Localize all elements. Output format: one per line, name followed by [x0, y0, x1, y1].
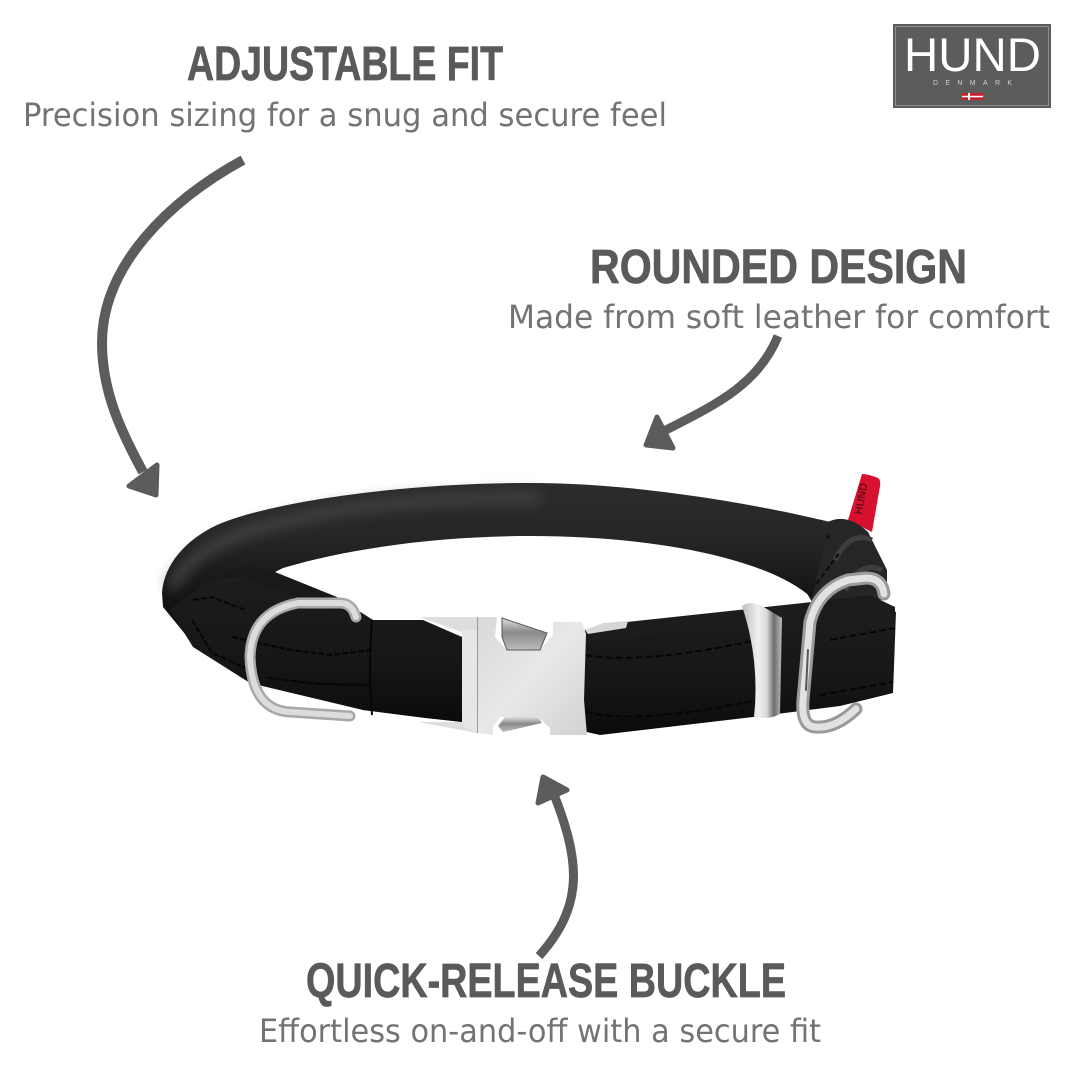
red brand tag — [848, 474, 880, 532]
arrow: adjustable fit to collar — [102, 160, 243, 495]
logo: HUND Denmark — [893, 24, 1051, 108]
logo: HUND Denmark: HUND — [904, 28, 1041, 81]
tube soft highlight — [172, 498, 540, 588]
metal keeper loop — [742, 603, 782, 718]
heading block: adjustable fit: ADJUSTABLE FIT — [187, 38, 503, 91]
right stitched knot — [775, 519, 887, 602]
logo: HUND Denmark: DENMARK — [933, 80, 1012, 87]
heading block: rounded design — [508, 241, 1050, 336]
heading block: quick-release buckle: Effortless on-and-off with a secure fit — [259, 1012, 821, 1050]
right leather strap — [582, 595, 896, 735]
heading block: adjustable fit: Precision sizing for a snug and secure feel — [23, 96, 667, 134]
arrow: quick-release buckle to collar — [538, 777, 573, 956]
heading block: quick-release buckle: QUICK-RELEASE BUCKLE — [306, 955, 786, 1008]
arrow: rounded design to collar — [646, 336, 778, 448]
left flat leather end — [170, 566, 462, 722]
heading block: rounded design: Made from soft leather for comfort — [508, 298, 1050, 336]
heading block: rounded design: ROUNDED DESIGN — [590, 241, 967, 294]
right D-ring — [803, 578, 884, 727]
left D-ring — [250, 603, 356, 716]
heading block: quick-release buckle — [259, 955, 821, 1050]
collar product photo — [162, 474, 896, 735]
quick-release buckle — [418, 617, 628, 735]
red brand tag: HUND — [853, 482, 870, 516]
heading block: adjustable fit — [23, 38, 667, 134]
rounded leather tube — [162, 483, 830, 640]
